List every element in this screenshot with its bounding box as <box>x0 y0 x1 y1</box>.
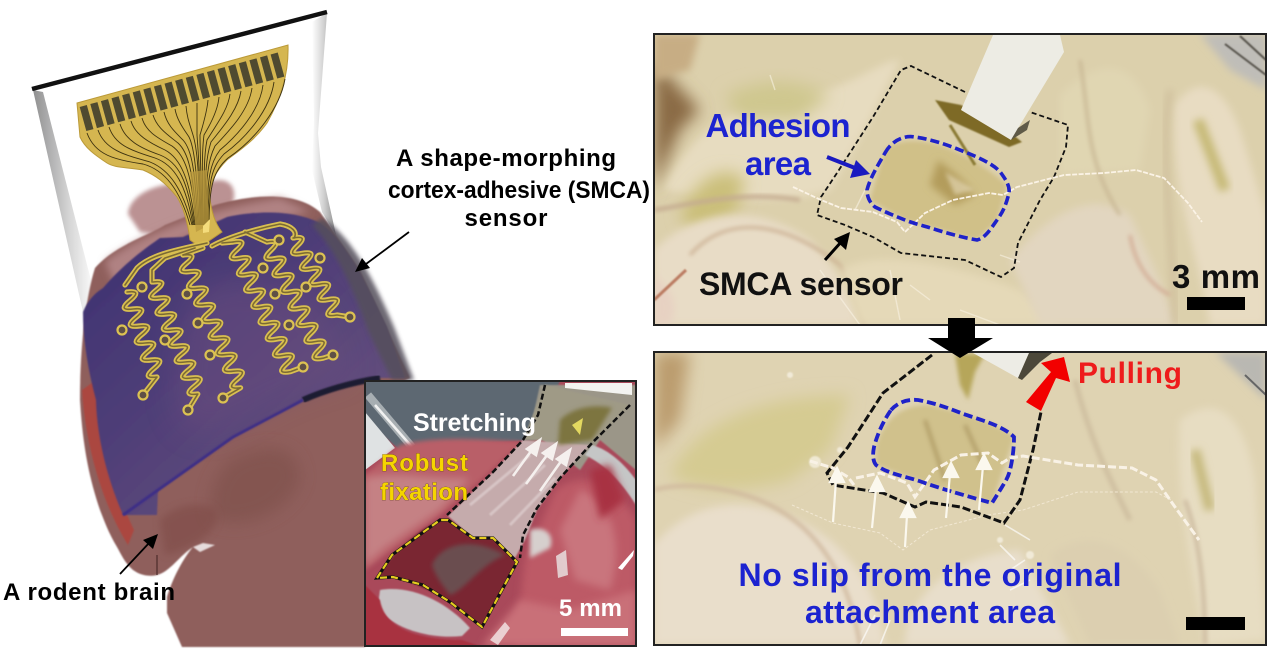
label: SMCA sensor description: cortex-adhesive (SMCA) <box>388 177 650 204</box>
inset stretching arrows <box>513 440 570 491</box>
contact pads <box>83 64 283 119</box>
label: SMCA sensor: SMCA sensor <box>699 266 903 302</box>
label: pulling: Pulling <box>1078 357 1182 390</box>
arrow: big black transition arrow <box>928 318 993 358</box>
label: SMCA sensor description: A shape-morphing <box>396 145 616 172</box>
fan-out traces <box>87 79 285 225</box>
icon: purple adhesive film <box>83 212 414 515</box>
label: adhesion area <box>706 107 850 182</box>
label: 3 mm: 3 mm <box>1172 258 1260 295</box>
sensor outline dashed black <box>827 355 1041 523</box>
arrow: pointing to rodent brain <box>120 534 158 574</box>
scale bar: 5 mm <box>561 628 628 636</box>
arrow: adhesion area <box>827 157 870 178</box>
inset dashed sensor outline <box>447 385 630 558</box>
label: adhesion area: Adhesion <box>706 107 850 144</box>
electrode end pads <box>118 236 354 414</box>
white dashed fold line <box>810 453 1199 540</box>
label: stretching: Stretching <box>413 409 536 437</box>
label: robust fixation: fixation <box>380 479 468 506</box>
white displacement arrows <box>830 455 991 547</box>
icon: brain body <box>80 180 410 647</box>
panel: brain photo during pulling <box>654 352 1266 645</box>
icon: white pull tab <box>973 353 1029 378</box>
bottom panel frame <box>654 352 1266 645</box>
panel: brain photo before pulling <box>654 34 1266 325</box>
label: robust fixation: Robust <box>381 450 468 477</box>
label: no slip caption: No slip from the original <box>738 557 1122 593</box>
top panel frame <box>654 34 1266 325</box>
scale bar: 3 mm <box>1187 297 1245 310</box>
label: adhesion area: area <box>745 145 812 182</box>
panel: surgical inset photo <box>365 381 636 646</box>
arrow: SMCA sensor <box>825 232 850 260</box>
icon: white pull tab <box>961 35 1064 140</box>
inset frame <box>365 381 636 646</box>
adhesion area dashed blue <box>873 400 1014 503</box>
label: a rodent brain: A rodent brain <box>3 579 175 606</box>
icon: transparent carrier sheet <box>32 12 336 312</box>
white dashed fold line <box>793 170 1202 232</box>
label: no slip caption: attachment area <box>805 594 1055 630</box>
adhesion area dashed blue <box>867 137 1009 240</box>
label: robust fixation <box>380 450 468 506</box>
illustration: rodent brain with SMCA sensor <box>32 12 414 647</box>
label: SMCA sensor description: sensor <box>464 205 548 232</box>
thin original outline dashed <box>792 492 1171 550</box>
inset yellow fixation outline <box>377 520 517 627</box>
sensor outline dashed black <box>817 66 1068 277</box>
icon: gold connector with contact pads and traces <box>77 45 288 247</box>
arrow: pointing to SMCA sensor <box>355 232 409 272</box>
label: SMCA sensor description <box>388 145 650 232</box>
icon: serpentine electrode rows <box>118 224 354 414</box>
label: no slip caption <box>738 557 1122 630</box>
scale bar: bottom <box>1186 617 1245 630</box>
arrow: red pulling arrow <box>1026 357 1070 411</box>
label: 5 mm: 5 mm <box>559 595 622 622</box>
